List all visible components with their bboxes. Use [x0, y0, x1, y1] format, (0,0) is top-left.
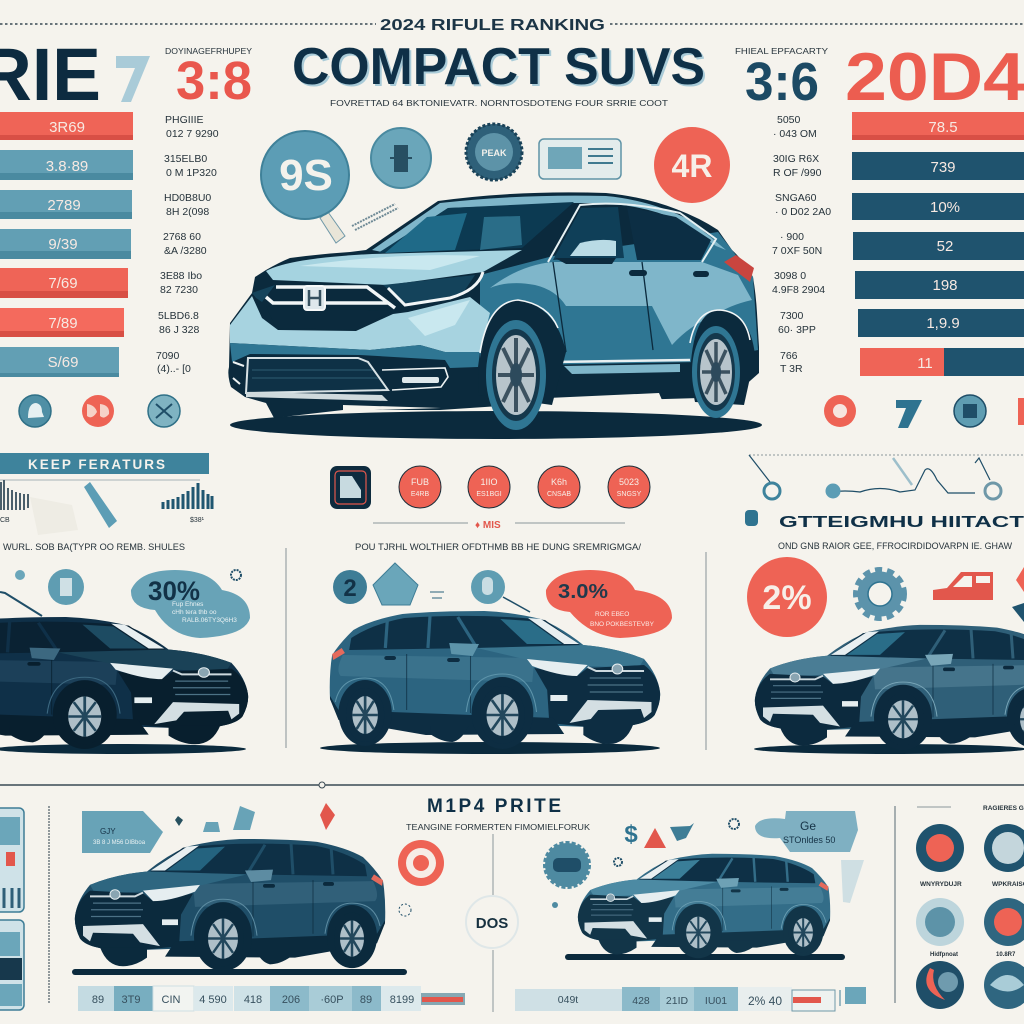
chrome grille	[266, 287, 395, 308]
centre decor: callout	[333, 563, 672, 638]
right bar labels: · 900	[780, 231, 804, 243]
SUV: navy bottom left	[72, 839, 407, 975]
side windows	[553, 207, 624, 260]
bottom left spec table: 206	[282, 994, 300, 1006]
centre decor: callout: BNO POKBESTEVBY	[590, 621, 655, 628]
gear	[856, 570, 904, 618]
right bar chart: 78.5	[928, 119, 958, 136]
bottom left spec table: 3T9	[122, 994, 140, 1006]
centre decor: callout: 3.0%	[558, 581, 608, 603]
left bar labels: (4)..- [0	[157, 363, 191, 375]
left bar chart: S/69	[48, 354, 78, 371]
left bar chart: 3.8·89	[46, 158, 88, 175]
eyebrow: 2024 RIFULE RANKING	[380, 17, 605, 34]
bottom right spec table: 428	[632, 995, 650, 1007]
divider lines	[286, 548, 706, 750]
left headline figures	[0, 33, 253, 116]
paper	[30, 497, 78, 535]
upper side light	[490, 262, 752, 345]
front wheel	[478, 300, 566, 405]
fascia band	[230, 343, 480, 368]
left mid decor: callout	[0, 569, 250, 638]
bottom left spec table: CIN	[162, 994, 181, 1006]
left panel divider	[48, 806, 50, 1003]
red stat circle	[654, 127, 730, 203]
right bar labels	[772, 114, 831, 375]
header: title block	[0, 17, 1024, 108]
bottom right decor: $	[624, 821, 638, 848]
efficiency icons	[747, 557, 1024, 637]
right bar labels: 766	[780, 350, 798, 362]
mirror	[570, 240, 616, 256]
efficiency line diagram	[749, 455, 1024, 499]
bottom right spec table: IU01	[705, 995, 727, 1007]
SUV: blue centre	[320, 611, 660, 754]
seal badge: PEAK	[481, 148, 507, 158]
centre feature badges: CNSAB	[547, 491, 571, 498]
left bar labels: 315ELB0	[164, 153, 207, 165]
left bar chart	[0, 112, 133, 377]
right bar labels: 4.9F8 2904	[772, 284, 825, 296]
right bar labels: 60· 3PP	[778, 324, 816, 336]
bottom left spec table: 4 590	[199, 994, 227, 1006]
top icons around main car	[261, 124, 730, 243]
door lines and handles	[553, 262, 653, 352]
bottom left spec table	[78, 986, 465, 1011]
bottom right spec table: 21ID	[666, 995, 689, 1007]
ribbon tag	[84, 482, 117, 528]
right bar chart: 10%	[930, 199, 960, 216]
main car: hero SUV	[228, 192, 762, 439]
ground gaps under body	[545, 393, 665, 407]
right icon grid: WNYRYDUJR	[920, 881, 962, 888]
mini chart right	[163, 483, 212, 509]
centre price title: DOS	[476, 915, 508, 932]
windshield	[378, 202, 574, 253]
hood	[266, 250, 522, 285]
left bar chart: 9/39	[48, 236, 78, 253]
right headline figures	[735, 39, 1024, 115]
right bar chart: 11	[917, 355, 933, 372]
big teal stat circle: 9S	[279, 151, 333, 200]
bottom left callouts and icons	[82, 803, 444, 916]
right bar chart: 739	[930, 159, 956, 176]
left bar labels: 7090	[156, 350, 180, 362]
left bar chart: 3R69	[49, 119, 85, 136]
right bar chart	[852, 112, 1024, 376]
left bar labels: 82 7230	[160, 284, 198, 296]
left bar labels: 012 7 9290	[166, 128, 219, 140]
right bar labels: 30IG R6X	[773, 153, 819, 165]
bottom right decor: Ge	[800, 819, 816, 833]
small teal circle	[371, 128, 431, 188]
bottom left callouts and icons: 3B 8 J M56 DIBboa	[93, 840, 146, 846]
right headline figures: FHIEAL EPFACARTY	[735, 47, 829, 56]
roof rail	[372, 196, 726, 252]
left mid decor: callout: RALB.06TY3Q6H3	[182, 617, 237, 624]
console icon	[539, 139, 621, 179]
left bar labels: 0 M 1P320	[166, 167, 217, 179]
right panel divider	[894, 806, 896, 1003]
left bar labels: 5LBD6.8	[158, 310, 199, 322]
caption: WURL. SOB BA(TYPR OO REMB. SHULES	[3, 542, 185, 553]
SUV: blue right	[754, 625, 1024, 754]
left headline figures: 3:8	[176, 51, 252, 111]
right bar labels: 5050	[777, 114, 801, 126]
centre decor: callout: ROR EBEO	[595, 611, 629, 618]
right bar chart: 52	[937, 238, 953, 255]
centre price title: M1P4 PRITE	[427, 796, 561, 817]
left bar labels: 2768 60	[163, 231, 201, 243]
left mid decor: callout: 30%	[148, 576, 200, 606]
centre feature badges: SNGSY	[617, 491, 642, 498]
front fascia light	[230, 296, 490, 352]
ground shadow	[230, 411, 762, 439]
centre feature badges: E4RB	[411, 491, 429, 498]
bottom right spec table: 049t	[558, 994, 578, 1006]
left icon row	[19, 395, 180, 427]
seal badge	[466, 124, 522, 180]
bottom right decor: STOnldes 50	[783, 835, 835, 845]
mini chart left	[1, 480, 28, 510]
tail light	[724, 255, 754, 282]
bottom left spec table: 418	[244, 994, 262, 1006]
left headline figures: DOYINAGEFRHUPEY	[165, 47, 253, 56]
efficiency heading: GTTEIGMHU HIITACT	[779, 514, 1024, 531]
rear wheel	[690, 310, 755, 405]
bottom right spec table: 2% 40	[748, 994, 782, 1008]
big teal stat circle	[261, 131, 349, 243]
key features panel: CB	[0, 517, 10, 524]
SUV: dark left	[0, 617, 248, 754]
centre feature badges: K6h	[551, 477, 567, 487]
heading banner	[0, 453, 209, 474]
right icon grid: 10.8R7	[996, 952, 1016, 958]
left bar labels: 86 J 328	[159, 324, 199, 336]
Honda badge	[304, 286, 325, 310]
right bar labels: 7 0XF 50N	[772, 245, 822, 257]
right bar labels: T 3R	[780, 363, 803, 375]
left mid decor: callout: Fup Ehnes	[172, 601, 204, 608]
centre feature badges: 1IIO	[480, 477, 498, 487]
centre price title	[406, 796, 590, 1012]
main title shadow: COMPACT SUVS	[294, 40, 707, 98]
centre feature badges: 5023	[619, 477, 639, 487]
left mid decor: callout: cHh tera thb oo	[172, 609, 217, 616]
right bar labels: 3098 0	[774, 270, 806, 282]
right bar labels: · 043 OM	[773, 128, 817, 140]
headlight	[383, 275, 475, 303]
efficiency icons: 2%	[762, 579, 812, 617]
centre feature badges: FUB	[411, 477, 429, 487]
right bar chart: 198	[932, 277, 958, 294]
key features panel: KEEP FERATURS	[28, 457, 165, 472]
left bar chart: 2789	[47, 197, 81, 214]
lower grille	[246, 358, 388, 393]
left battery stack icon	[0, 808, 24, 1010]
bottom right decor	[545, 811, 864, 908]
centre price title: TEANGINE FORMERTEN FIMOMIELFORUK	[406, 822, 590, 832]
right icon grid: Hidfpnoat	[930, 952, 958, 958]
right headline figures: 3:6	[745, 52, 819, 112]
bottom divider	[0, 782, 1024, 788]
bottom left spec table: 89	[92, 994, 104, 1006]
red stat circle: 4R	[672, 148, 712, 184]
right icon row	[824, 395, 1024, 428]
left bar labels: 8H 2(098	[166, 206, 209, 218]
left bar labels: 3E88 Ibo	[160, 270, 202, 282]
bottom left spec table: 8199	[390, 994, 414, 1006]
right bar chart: 1,9.9	[926, 315, 960, 332]
SUV: blue bottom right crossover	[565, 854, 845, 960]
left bar chart: 7/69	[48, 275, 78, 292]
side panel teal	[480, 232, 758, 366]
efficiency heading: OND GNB RAIOR GEE, FFROCIRDIDOVARPN IE. GHAW	[778, 541, 1012, 552]
right headline figures: 20D4	[845, 39, 1024, 115]
key features panel	[0, 453, 212, 553]
right bar labels: R OF /990	[773, 167, 822, 179]
bottom right spec table	[515, 987, 866, 1011]
main title: COMPACT SUVS	[292, 38, 705, 96]
bottom left spec table: 89	[360, 994, 372, 1006]
centre feature badges: ES1BGI	[476, 491, 502, 498]
centre feature badges	[330, 466, 650, 553]
efficiency heading	[745, 510, 1024, 552]
right icon grid	[916, 805, 1024, 1009]
right bar labels: · 0 D02 2A0	[775, 206, 831, 218]
centre decor: callout: 2	[343, 575, 357, 602]
bottom left callouts and icons: GJY	[100, 827, 116, 836]
dark silhouette	[228, 192, 759, 418]
key features panel: $38¹	[190, 517, 205, 524]
bottom left spec table: ·60P	[320, 994, 344, 1006]
centre feature badges: ♦ MIS	[475, 520, 501, 531]
left bar labels	[156, 114, 219, 375]
caption: POU TJRHL WOLTHIER OFDTHMB BB HE DUNG SREMRIGMGA/	[355, 542, 641, 553]
red car icon	[933, 572, 993, 600]
left bar labels: PHGIIIE	[165, 114, 204, 126]
subtitle: FOVRETTAD 64 BKTONIEVATR. NORNTOSDOTENG FOUR SRRIE COOT	[330, 98, 668, 108]
left bar labels: HD0B8U0	[164, 192, 211, 204]
sill	[553, 360, 690, 362]
left bar labels: &A /3280	[164, 245, 207, 257]
right bar labels: SNGA60	[775, 192, 817, 204]
right bar labels: 7300	[780, 310, 804, 322]
left bar chart: 7/89	[48, 315, 78, 332]
